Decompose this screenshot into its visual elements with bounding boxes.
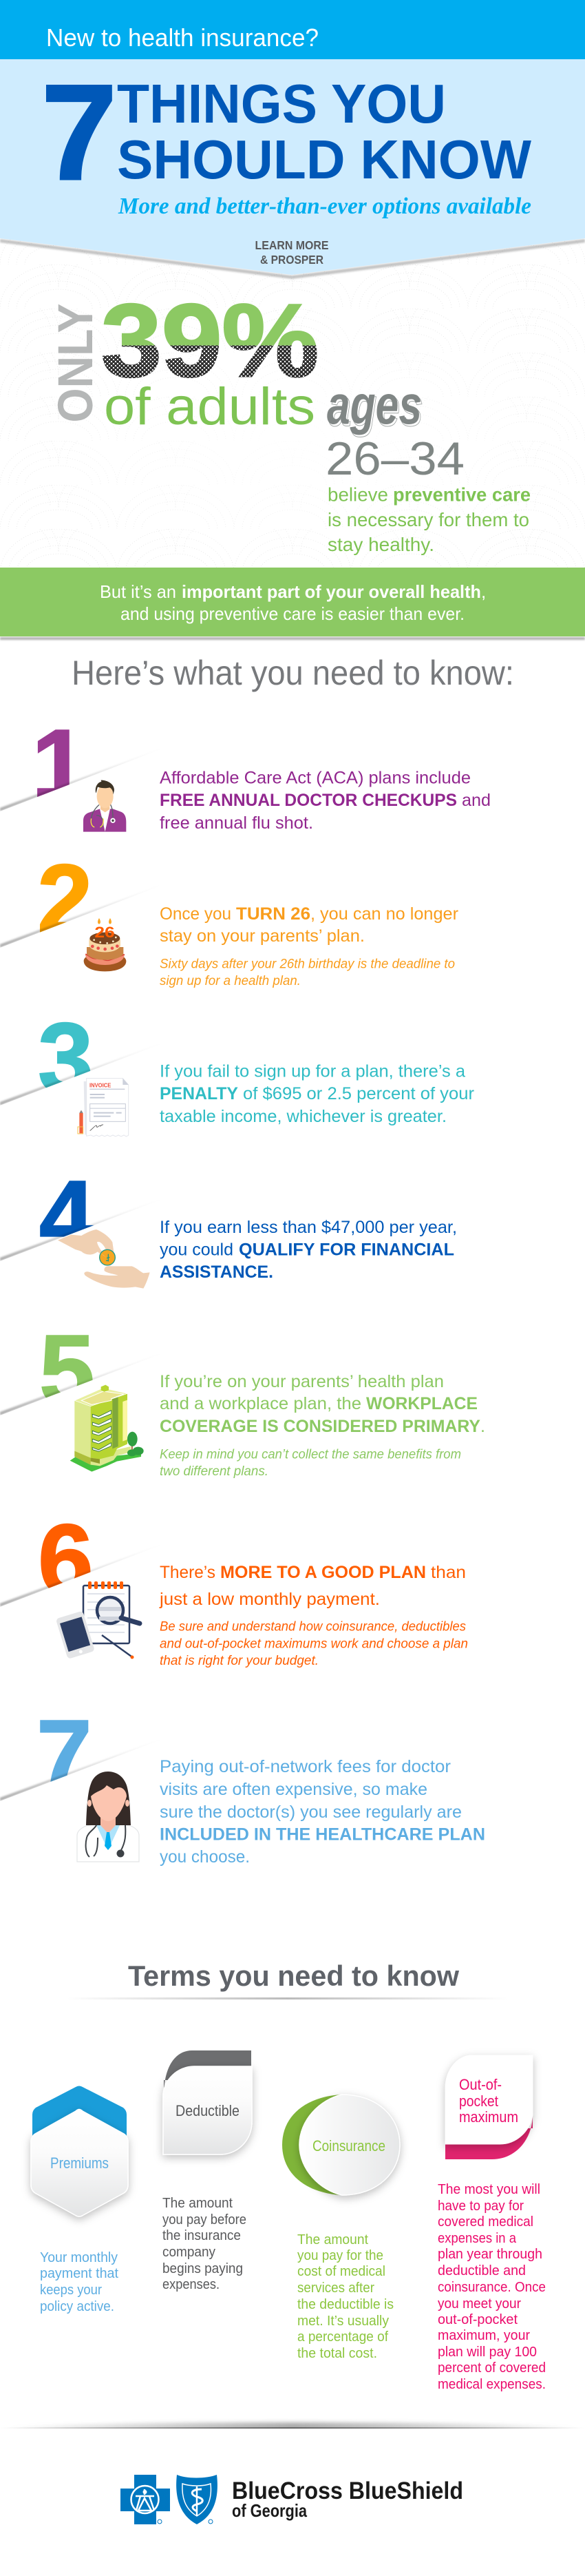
39 percent: 39%: [101, 282, 319, 398]
out-of-pocket description: deductible and: [438, 2263, 526, 2278]
number 7: 7: [36, 1699, 92, 1811]
step 1: [0, 709, 491, 854]
text 3: PENALTY: [160, 1084, 238, 1103]
deductible description: company: [162, 2244, 216, 2260]
out-of-pocket badge: Out-of-: [459, 2076, 502, 2093]
number 1: 1: [32, 709, 87, 820]
of adults: of adults: [104, 377, 315, 436]
premiums description: [40, 2250, 118, 2314]
text 6: There’s: [160, 1563, 215, 1582]
text 6: [159, 1563, 468, 1668]
text 2: stay on your parents’ plan.: [160, 926, 365, 946]
out-of-pocket description: you meet your: [438, 2296, 521, 2312]
deductible description: you pay before: [162, 2212, 246, 2227]
out-of-pocket description: have to pay for: [438, 2198, 524, 2214]
coinsurance description: a percentage of: [297, 2329, 388, 2345]
out-of-pocket description: maximum, your: [438, 2327, 530, 2343]
text 1: Affordable Care Act (ACA) plans include: [160, 769, 471, 788]
banner text: important part of your overall health: [182, 581, 481, 602]
number 4: 4: [39, 1160, 95, 1271]
logo wordmark: BlueCross BlueShield: [232, 2478, 463, 2504]
icon: office building: [70, 1385, 144, 1472]
text 7: you choose.: [160, 1847, 250, 1867]
coinsurance description: The amount: [297, 2232, 368, 2247]
out-of-pocket description: The most you will: [438, 2181, 540, 2197]
deductible description: expenses.: [162, 2276, 220, 2292]
26-34: 26–34: [326, 433, 465, 485]
icon: hands with coin: [58, 1229, 150, 1289]
text 1: [160, 769, 491, 833]
icon: blue shield: [176, 2475, 217, 2524]
deductible description: the insurance: [162, 2227, 241, 2243]
coinsurance description: services after: [297, 2280, 374, 2296]
coinsurance description: met. It’s usually: [297, 2313, 390, 2329]
text 4: [160, 1218, 457, 1282]
panel: dotted pattern background: [0, 234, 585, 572]
out-of-pocket badge: pocket: [459, 2092, 498, 2110]
text 1: free annual flu shot.: [160, 813, 313, 833]
coinsurance description: [297, 2232, 394, 2361]
banner text: ,: [481, 581, 486, 602]
title: THINGS YOU: [117, 73, 446, 134]
text 7: [160, 1757, 485, 1867]
premiums badge: Premiums: [50, 2154, 109, 2172]
text 3: If you fail to sign up for a plan, there’s a: [160, 1062, 465, 1081]
text 2: [160, 904, 458, 988]
text 6: that is right for your budget.: [160, 1653, 319, 1668]
text 5: Keep in mind you can’t collect the same benefits from: [160, 1446, 461, 1462]
39 percent: 39%: [101, 282, 319, 398]
text 6: than: [431, 1563, 466, 1582]
number 6: 6: [38, 1504, 94, 1615]
text 5: If you’re on your parents’ health plan: [160, 1372, 444, 1391]
text 5: two different plans.: [160, 1464, 268, 1479]
text 5: COVERAGE IS CONSIDERED PRIMARY: [160, 1417, 480, 1436]
title: SHOULD KNOW: [117, 129, 531, 190]
number 3: 3: [38, 1002, 94, 1114]
icon: male doctor: [83, 780, 126, 832]
icon: invoice: [78, 1079, 129, 1136]
text 3: taxable income, whichever is greater.: [160, 1107, 447, 1126]
step 3: [0, 1002, 474, 1143]
coinsurance badge: [282, 2095, 400, 2195]
icon: notepad, magnifier and phone: [56, 1581, 140, 1659]
text 2: Sixty days after your 26th birthday is the deadline to: [160, 956, 455, 971]
text 7: sure the doctor(s) you see regularly are: [160, 1803, 462, 1822]
coinsurance description: you pay for the: [297, 2247, 383, 2263]
learn more label: [255, 238, 329, 267]
out-of-pocket description: [438, 2181, 546, 2392]
terms heading: [67, 1960, 507, 1999]
term: out-of-pocket maximum: [438, 2055, 546, 2392]
panel: green banner: [0, 568, 585, 640]
text 7: INCLUDED IN THE HEALTHCARE PLAN: [160, 1825, 485, 1845]
deductible description: The amount: [162, 2195, 233, 2211]
out-of-pocket description: medical expenses.: [438, 2376, 546, 2392]
text 2: Once you: [160, 904, 231, 924]
text 5: WORKPLACE: [366, 1394, 478, 1413]
step 4: [0, 1160, 457, 1295]
premiums description: policy active.: [40, 2298, 114, 2314]
intro question: New to health insurance?: [46, 23, 319, 52]
deductible description: begins paying: [162, 2261, 243, 2276]
section heading: Here’s what you need to know:: [72, 654, 514, 692]
text 4: you could: [160, 1240, 233, 1259]
term: coinsurance: [282, 2095, 400, 2361]
icon: birthday cake: [84, 918, 126, 971]
learn more label: LEARN MORE: [255, 238, 329, 252]
out-of-pocket description: plan year through: [438, 2246, 542, 2262]
coinsurance description: cost of medical: [297, 2263, 385, 2279]
text 2: TURN 26: [236, 904, 310, 924]
logo wordmark: [232, 2478, 463, 2521]
footer shadow: [0, 2422, 585, 2576]
premiums description: keeps your: [40, 2282, 102, 2298]
text 1: FREE ANNUAL DOCTOR CHECKUPS: [160, 791, 457, 810]
statistic description: is necessary for them to: [328, 509, 529, 530]
panel: header banner: [0, 56, 585, 279]
panel: top bar: [0, 0, 585, 59]
text 5: .: [480, 1417, 485, 1436]
label ONLY: ONLY: [49, 303, 103, 423]
text 6: MORE TO A GOOD PLAN: [220, 1563, 426, 1582]
banner text: and using preventive care is easier than ever.: [120, 603, 465, 624]
text 1: and: [462, 791, 491, 810]
premiums badge: [31, 2086, 128, 2216]
text 4: QUALIFY FOR FINANCIAL: [239, 1240, 454, 1259]
learn more label: & PROSPER: [260, 253, 323, 267]
icon: female doctor: [77, 1772, 139, 1862]
statistic description: believe: [328, 484, 388, 506]
banner text: But it’s an: [100, 581, 176, 602]
39 percent: [102, 303, 317, 379]
logo wordmark: of Georgia: [232, 2500, 307, 2521]
out-of-pocket badge: maximum: [459, 2108, 518, 2126]
coinsurance badge: Coinsurance: [312, 2137, 385, 2154]
text 7: visits are often expensive, so make: [160, 1780, 427, 1799]
text 4: If you earn less than $47,000 per year,: [160, 1218, 457, 1237]
coinsurance description: the deductible is: [297, 2296, 394, 2312]
statistic description: stay healthy.: [328, 534, 434, 555]
text 5: and a workplace plan, the: [160, 1394, 361, 1413]
ages script: ages: [327, 374, 422, 435]
text 5: [160, 1372, 485, 1479]
number 2: 2: [37, 844, 93, 955]
deductible badge: [163, 2050, 252, 2154]
out-of-pocket description: coinsurance. Once: [438, 2279, 546, 2295]
premiums description: Your monthly: [40, 2250, 118, 2265]
title: [117, 73, 531, 190]
big numeral 7: 7: [41, 56, 117, 208]
out-of-pocket description: expenses in a: [438, 2230, 517, 2246]
term: premiums: [31, 2086, 128, 2314]
statistic description: [328, 484, 531, 555]
text 3: of $695 or 2.5 percent of your: [243, 1084, 474, 1103]
text 6: and out-of-pocket maximums work and choose a plan: [160, 1637, 468, 1652]
step 2: [0, 844, 458, 992]
deductible description: [162, 2195, 246, 2292]
text 2: sign up for a health plan.: [160, 973, 301, 988]
ages script: ages: [328, 376, 423, 437]
premiums description: payment that: [40, 2265, 118, 2281]
step 7: [0, 1699, 485, 1867]
logo: [120, 2475, 463, 2524]
tagline: More and better-than-ever options available: [118, 194, 531, 219]
text 6: just a low monthly payment.: [159, 1590, 380, 1609]
step 5: [0, 1314, 485, 1479]
term: deductible: [162, 2050, 252, 2292]
out-of-pocket badge: [445, 2055, 533, 2159]
invoice label: INVOICE: [89, 1082, 111, 1088]
text 6: Be sure and understand how coinsurance, deductibles: [160, 1619, 466, 1634]
deductible badge: Deductible: [176, 2102, 240, 2119]
out-of-pocket description: plan will pay 100: [438, 2344, 537, 2360]
text 2: , you can no longer: [310, 904, 458, 924]
out-of-pocket description: out-of-pocket: [438, 2312, 518, 2327]
text 4: ASSISTANCE.: [160, 1263, 273, 1282]
banner text: [100, 581, 486, 624]
cake number: 26: [94, 924, 115, 941]
out-of-pocket description: percent of covered: [438, 2360, 546, 2376]
text 3: [160, 1062, 474, 1126]
statistic description: preventive care: [393, 484, 531, 506]
statistic block: [49, 282, 531, 555]
step 6: [0, 1504, 468, 1668]
icon: blue cross: [120, 2475, 170, 2524]
terms heading: Terms you need to know: [128, 1960, 459, 1992]
number 5: 5: [39, 1314, 95, 1426]
coinsurance description: the total cost.: [297, 2345, 377, 2361]
out-of-pocket description: covered medical: [438, 2214, 533, 2230]
text 7: Paying out-of-network fees for doctor: [160, 1757, 451, 1776]
